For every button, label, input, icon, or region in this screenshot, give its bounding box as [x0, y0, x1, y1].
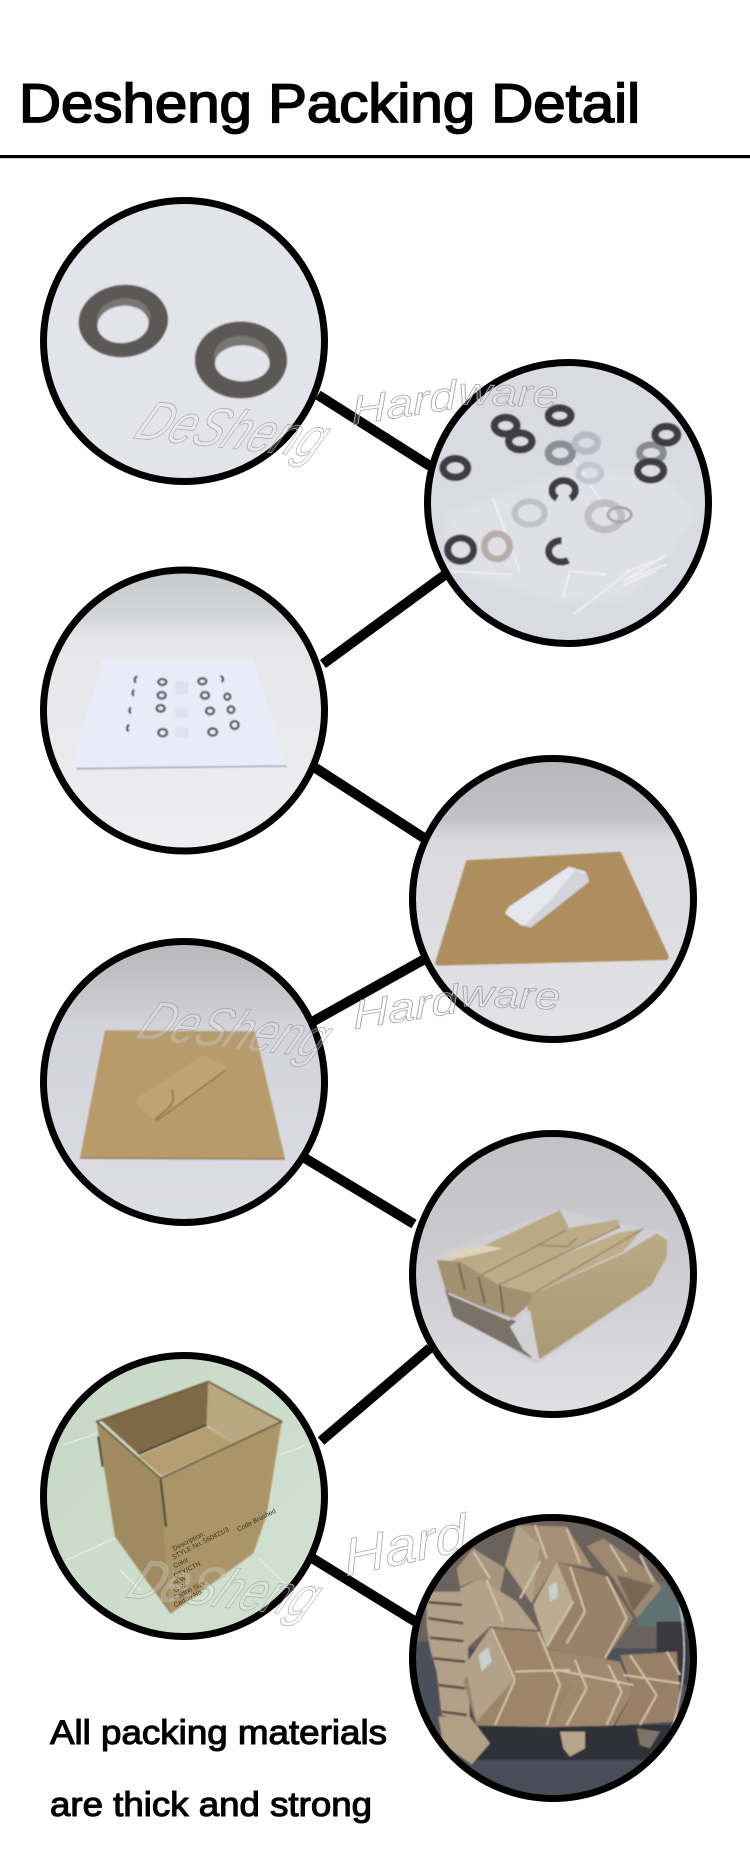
background areas — [417, 1521, 679, 1649]
step 1 panel: two metal rings — [43, 200, 325, 482]
step 6 panel: plastic bagged kraft bundle — [412, 1133, 694, 1415]
central carton — [533, 1562, 633, 1660]
watermark: DeSheng Hardware, lower: Hard — [341, 1504, 472, 1588]
carton label text: Carton Size — [173, 1580, 207, 1602]
icon: metal ring left — [75, 281, 172, 361]
watermark: DeSheng Hardware, upper: DeSheng — [126, 390, 341, 469]
carton label text: STYLE No. 550421/3 — [171, 1526, 231, 1561]
right upper carton — [587, 1538, 662, 1618]
caption — [50, 1714, 387, 1824]
reflected white arc — [670, 1578, 684, 1735]
lower right carton — [615, 1652, 680, 1726]
pale rings — [484, 435, 663, 559]
watermark: DeSheng Hardware, lower — [118, 1504, 472, 1628]
kraft roll — [135, 1055, 225, 1121]
step 2 panel: rings in plastic bags — [427, 362, 709, 644]
pallet legs — [560, 1732, 585, 1757]
floor tile seams — [63, 1433, 310, 1592]
carton label text: N.W — [173, 1574, 188, 1587]
kraft rolls — [452, 1210, 569, 1269]
top-left carton — [457, 1548, 505, 1592]
carton tape stripes — [473, 1525, 680, 1725]
label patches — [478, 1647, 492, 1672]
carton label text: Color — [172, 1556, 190, 1570]
carton label text — [171, 1508, 277, 1609]
caption: All packing materials — [50, 1714, 387, 1752]
kraft paper sheet — [80, 1030, 285, 1159]
carton label text: Carton No. — [173, 1588, 205, 1609]
carton label text: QTY/CTN — [173, 1561, 202, 1580]
carton label text: Code Brushed — [236, 1508, 277, 1533]
title: Desheng Packing Detail — [19, 72, 640, 134]
carton label text: G.W — [173, 1582, 188, 1594]
big lower-left carton — [463, 1628, 570, 1727]
caption: are thick and strong — [50, 1786, 372, 1824]
plastic bag sheen — [444, 466, 668, 567]
carton label text: Description: — [172, 1531, 206, 1553]
watermark: DeSheng Hardware, middle: Hard — [352, 977, 461, 1038]
faint bag squares — [175, 681, 188, 738]
watermark: DeSheng Hardware, upper: ware — [458, 371, 559, 416]
bundle plastic wrap — [437, 1211, 645, 1362]
watermark: DeSheng Hardware, middle: DeSheng — [128, 990, 343, 1069]
icon: metal ring right — [195, 322, 287, 398]
watermark: DeSheng Hardware, upper — [126, 371, 559, 469]
step 3 panel: rings on white sheet — [43, 570, 325, 852]
white paper sheet — [72, 659, 287, 770]
title rule — [0, 155, 750, 158]
step 7 panel: open cardboard carton — [43, 1355, 325, 1637]
watermark: DeSheng Hardware, middle: ware — [460, 973, 561, 1018]
plastic wrinkles — [453, 458, 666, 615]
dark under-pallet band — [476, 1724, 672, 1760]
small rings on sheet — [127, 676, 239, 736]
watermark: DeSheng Hardware, upper: Hard — [350, 373, 459, 434]
connector lines between steps — [303, 395, 446, 1622]
step 4 panel: white roll on kraft paper — [412, 758, 694, 1040]
lower middle carton — [543, 1648, 633, 1727]
left carton planks — [427, 1592, 470, 1722]
end folds — [437, 1260, 533, 1318]
top carton — [517, 1524, 593, 1603]
mid-left carton — [460, 1578, 538, 1648]
white roll — [505, 867, 589, 928]
watermark: DeSheng Hardware, middle — [128, 973, 561, 1069]
watermark: DeSheng Hardware, lower: DeSheng — [118, 1549, 333, 1628]
dark rings — [443, 408, 678, 562]
roll creases — [478, 1227, 643, 1293]
step 8 panel: stacked taped cartons on pallet — [410, 1515, 700, 1803]
kraft paper sheet — [435, 852, 669, 966]
carton — [97, 1382, 282, 1614]
front roll — [527, 1233, 667, 1360]
step 5 panel: kraft wrapped roll — [43, 941, 325, 1223]
corner pallet block — [438, 1717, 490, 1764]
